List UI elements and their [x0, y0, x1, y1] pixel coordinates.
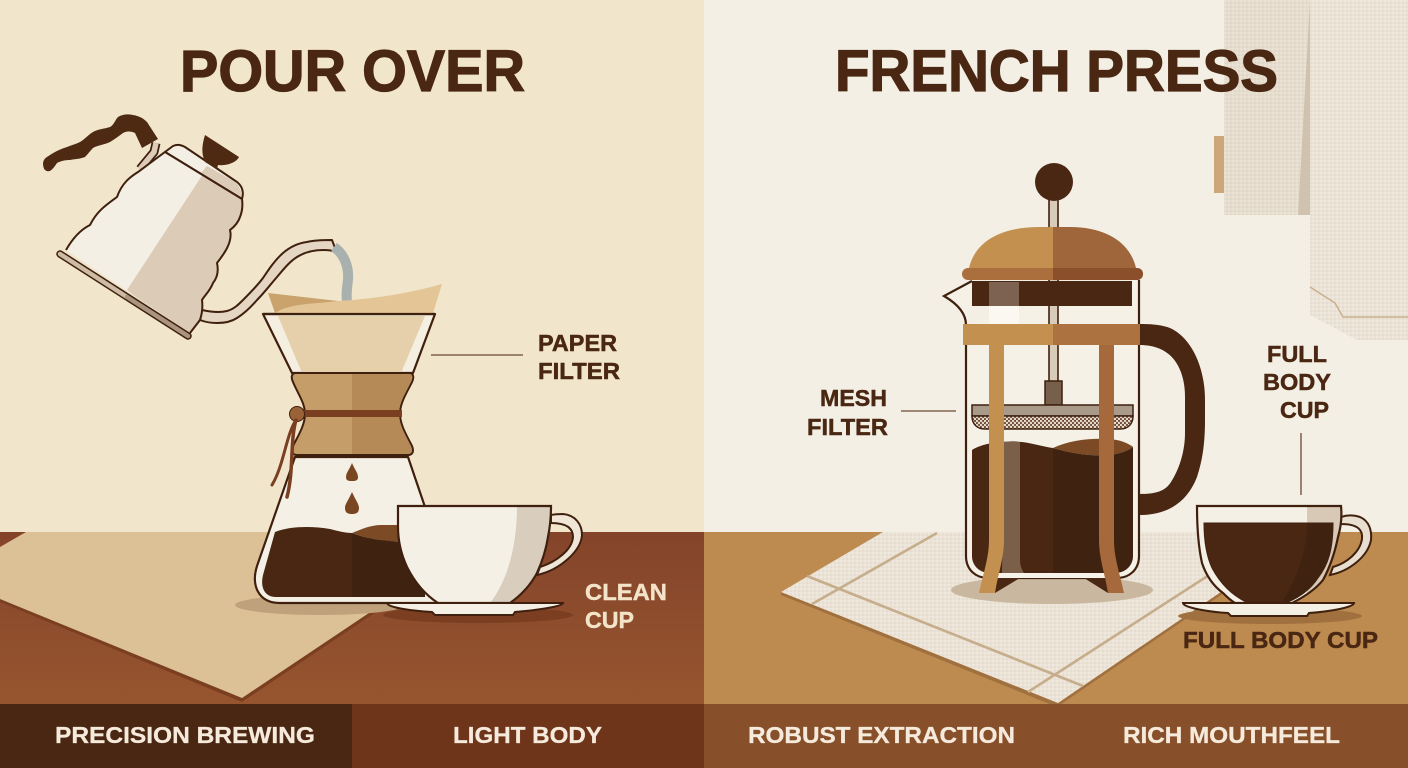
cone glass [263, 314, 435, 373]
rim dark [127, 297, 188, 336]
coffee left [972, 442, 1053, 573]
label: clean cup: CLEAN [585, 579, 667, 605]
coffee back surface [352, 525, 420, 545]
kettle lid [165, 145, 243, 199]
footer bar: rich mouthfeel: RICH MOUTHFEEL [1123, 722, 1340, 748]
lid rim shade [1053, 268, 1143, 280]
footer bar: light body: LIGHT BODY [453, 722, 602, 748]
footer bar: precision brewing [0, 704, 352, 768]
glare [989, 306, 1019, 324]
mesh filter plate [972, 405, 1133, 416]
coffee drop [345, 492, 359, 514]
label: mesh filter: FILTER [807, 414, 888, 440]
kettle body outline [66, 152, 242, 333]
saucer [1183, 603, 1354, 616]
coffee right [1053, 447, 1133, 573]
frame leg right [1099, 345, 1124, 593]
coffee left [262, 527, 352, 597]
feet [995, 578, 1020, 593]
linen towel [1214, 0, 1408, 340]
panel: french press table [704, 532, 1408, 704]
footer bar: rich mouthfeel [1056, 704, 1408, 768]
handle bracket [140, 143, 156, 169]
kettle knob [202, 135, 239, 169]
mesh filter [972, 416, 1133, 429]
label line: mesh filter [901, 410, 956, 412]
linen cloth [781, 532, 1313, 707]
label: clean cup [585, 579, 667, 633]
label: full body cup stacked: BODY [1263, 369, 1331, 395]
plunger knob [1035, 163, 1073, 201]
title: pour over: POUR OVER [180, 39, 525, 104]
collar shade [352, 374, 412, 454]
coffee drop [346, 463, 358, 481]
cup outline [1197, 506, 1341, 603]
label: clean cup: CUP [585, 607, 634, 633]
wood collar [292, 373, 413, 455]
footer bar: precision brewing: PRECISION BREWING [55, 722, 315, 748]
cone rim [263, 313, 435, 315]
label: paper filter [538, 330, 620, 384]
lid rim [962, 268, 1143, 280]
kettle handle [43, 114, 158, 171]
kettle body [67, 153, 242, 332]
cup handle [537, 514, 582, 575]
full body cup [1183, 504, 1371, 616]
kettle base rim [60, 254, 188, 336]
label: full body cup: FULL BODY CUP [1183, 627, 1378, 653]
saucer shadow: left [383, 607, 573, 623]
frame leg left [979, 345, 1004, 593]
lid inner band [972, 281, 1132, 306]
label: paper filter: PAPER [538, 330, 617, 356]
filter front flap [275, 284, 442, 313]
water stream [334, 247, 348, 301]
rim light [60, 254, 127, 297]
lid glass highlight [989, 282, 1019, 306]
carafe glass [255, 457, 470, 603]
feet [1084, 578, 1110, 593]
panel: pour over table [0, 532, 704, 704]
lid shade [201, 166, 242, 197]
filter back flap [268, 293, 338, 313]
kraft paper mat [0, 532, 495, 702]
cup body [1199, 507, 1340, 602]
glass highlight over coffee [1002, 441, 1024, 573]
plunger nut [1045, 381, 1062, 405]
cup outline [398, 506, 551, 603]
handle bracket fill [140, 143, 156, 169]
footer bar: robust extraction: ROBUST EXTRACTION [748, 722, 1015, 748]
panel: french press background [704, 0, 1408, 532]
chemex carafe [255, 284, 470, 603]
label: mesh filter [807, 385, 888, 440]
coffee back surface [1053, 439, 1133, 455]
coffee shade [1282, 523, 1333, 602]
label: full body cup stacked: CUP [1280, 397, 1329, 423]
frame band [963, 324, 1053, 345]
lid seam [165, 152, 242, 199]
cup handle [1330, 516, 1371, 575]
plunger rod [1049, 198, 1058, 388]
leather tie [272, 406, 402, 497]
footer bar: robust extraction [704, 704, 1056, 768]
coffee in cup [1204, 523, 1333, 602]
title: french press: FRENCH PRESS [835, 39, 1278, 104]
label line: paper filter [431, 354, 523, 356]
cup body [399, 507, 550, 602]
label: paper filter: FILTER [538, 358, 620, 384]
label: full body cup stacked: FULL [1267, 341, 1327, 367]
panel: pour over background [0, 0, 704, 532]
glass carafe [966, 280, 1139, 578]
footer bar: light body [352, 704, 704, 768]
label line: full body cup [1300, 433, 1302, 495]
kettle spout [200, 240, 337, 323]
label: mesh filter: MESH [820, 385, 887, 411]
label: full body cup stacked [1263, 341, 1331, 423]
frame band shade [1053, 324, 1140, 345]
press handle [1140, 324, 1205, 515]
saucer [387, 603, 563, 615]
lid dome shade [1053, 227, 1136, 268]
kettle [43, 114, 337, 350]
lid dome [969, 227, 1053, 268]
clean cup [387, 504, 582, 615]
french press [944, 163, 1205, 593]
pour spout [944, 281, 972, 325]
coffee right [352, 533, 425, 597]
paper filter cone [278, 316, 425, 373]
saucer shadow: right [1178, 608, 1362, 624]
base rim [990, 573, 1116, 578]
